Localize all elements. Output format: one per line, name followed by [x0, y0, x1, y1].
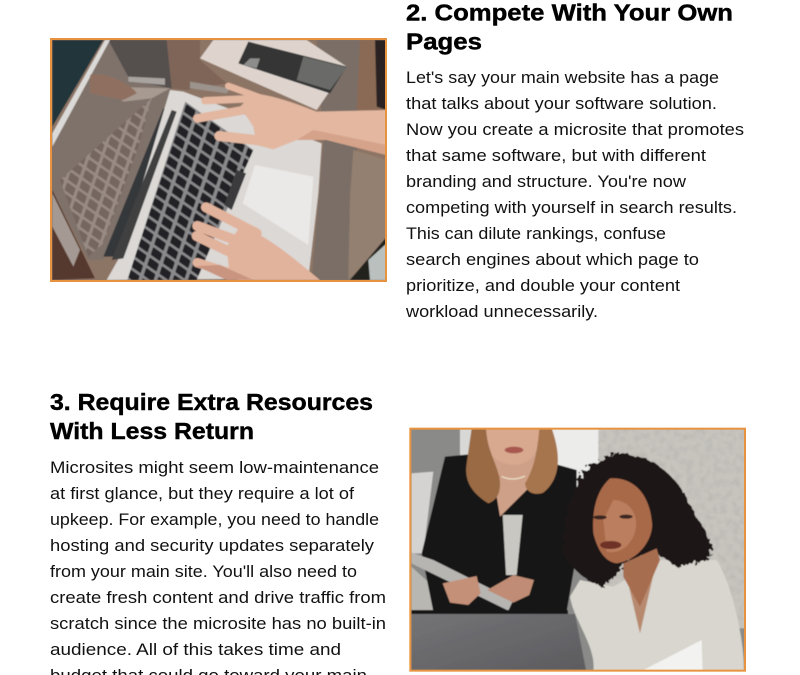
desk wood strip [312, 40, 360, 280]
photo: hands typing on a laptop [50, 38, 387, 282]
lower hand [197, 207, 257, 278]
hands [443, 576, 481, 605]
marble phone case [200, 40, 347, 110]
face and neck [593, 478, 652, 563]
hinge [103, 108, 165, 258]
white top [503, 515, 523, 575]
keyboard [127, 102, 253, 280]
curly hair [563, 453, 711, 587]
pen [190, 82, 230, 93]
reflected keyboard [60, 98, 152, 257]
photo: two women looking at a laptop [409, 428, 746, 672]
black blazer [422, 453, 577, 612]
section 2 body text: competing with yourself in search results. [406, 198, 737, 217]
orange frame [51, 39, 386, 281]
section 2 heading [406, 0, 733, 54]
lid edge [52, 190, 95, 280]
upper hand [197, 86, 270, 142]
section 3 heading: With Less Return [50, 418, 254, 444]
section 3 heading: 3. Require Extra Resources [50, 389, 373, 415]
section 2 heading: Pages [406, 28, 482, 54]
section 3 body text: from your main site. You'll also need to [50, 562, 357, 581]
laptop lid [411, 614, 586, 670]
section 3 body text: scratch since the microsite has no built-in [50, 614, 386, 633]
section 3 body text: hosting and security updates separately [50, 536, 375, 555]
section 3 body text: at first glance, but they require a lot of [50, 484, 354, 503]
hinge strip [112, 110, 177, 260]
reflected hand [90, 74, 137, 100]
laptop base [107, 90, 322, 280]
section 3 body text [50, 458, 386, 675]
section 3 body text: Microsites might seem low-maintenance [50, 458, 379, 477]
section 2 heading: 2. Compete With Your Own [406, 0, 733, 26]
orange frame [410, 429, 745, 671]
section 2 body text: Now you create a microsite that promotes [406, 120, 744, 139]
phone [238, 42, 347, 93]
section 2 body text: that same software, but with different [406, 146, 706, 165]
section 3 heading [50, 389, 373, 444]
section 2 body text: prioritize, and double your content [406, 276, 680, 295]
textured wall [597, 428, 747, 628]
section 2 body text: search engines about which page to [406, 250, 699, 269]
folder [411, 553, 513, 611]
necklace [502, 476, 525, 479]
section 2 body text: that talks about your software solution. [406, 94, 717, 113]
section 2 body text: workload unnecessarily. [405, 302, 598, 321]
section 2 body text [405, 68, 744, 321]
neck and chest [490, 453, 537, 517]
white blouse [570, 560, 744, 672]
section 3 body text: create fresh content and drive traffic from [50, 588, 386, 607]
lips [505, 447, 523, 453]
white doorway [551, 430, 599, 488]
section 3 body text: upkeep. For example, you need to handle [50, 510, 379, 529]
laptop screen [52, 40, 172, 260]
section 2 body text: Let's say your main website has a page [406, 68, 719, 87]
long hair [466, 428, 500, 503]
face [486, 430, 540, 464]
section 3 body text: audience. All of this takes time and [50, 640, 341, 659]
trackpad [243, 165, 313, 245]
section 2 body text: This can dilute rankings, confuse [406, 224, 666, 243]
section 2 body text: branding and structure. You're now [406, 172, 687, 191]
eyes and lips [593, 515, 607, 519]
